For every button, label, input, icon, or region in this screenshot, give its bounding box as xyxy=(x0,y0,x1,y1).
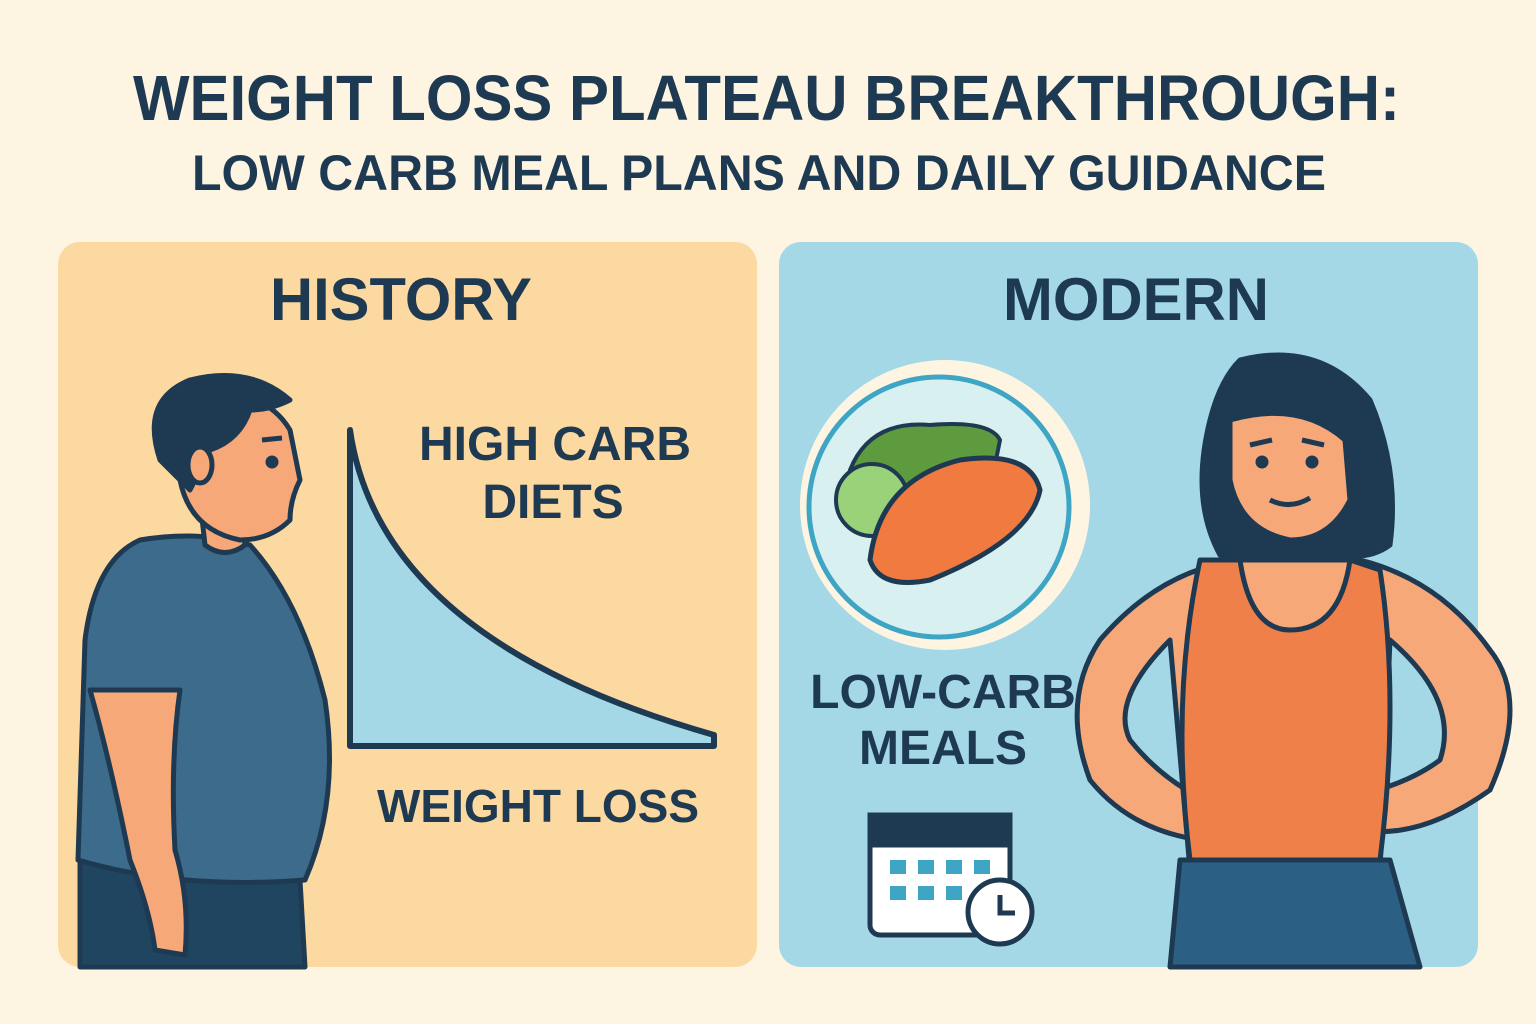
label: high carb diets: HIGH CARB xyxy=(419,418,691,471)
panel: history xyxy=(58,242,757,967)
label: high carb diets xyxy=(419,418,691,529)
panel: modern xyxy=(779,242,1510,967)
icon: calendar with clock xyxy=(870,815,1032,944)
label: low-carb meals xyxy=(810,666,1076,775)
label: low-carb meals: LOW-CARB xyxy=(810,666,1076,719)
heading: history: HISTORY xyxy=(270,266,532,333)
chart: weight loss curve xyxy=(350,430,714,746)
icon: salmon plate xyxy=(800,360,1090,650)
label: weight loss: WEIGHT LOSS xyxy=(377,780,699,832)
title: LOW CARB MEAL PLANS AND DAILY GUIDANCE xyxy=(192,145,1326,201)
man illustration xyxy=(78,376,330,967)
title xyxy=(133,62,1400,201)
label: high carb diets: DIETS xyxy=(482,476,624,529)
woman illustration xyxy=(1077,355,1510,967)
label: low-carb meals: MEALS xyxy=(859,722,1027,775)
title: WEIGHT LOSS PLATEAU BREAKTHROUGH: xyxy=(133,62,1400,134)
heading: modern: MODERN xyxy=(1003,266,1269,333)
